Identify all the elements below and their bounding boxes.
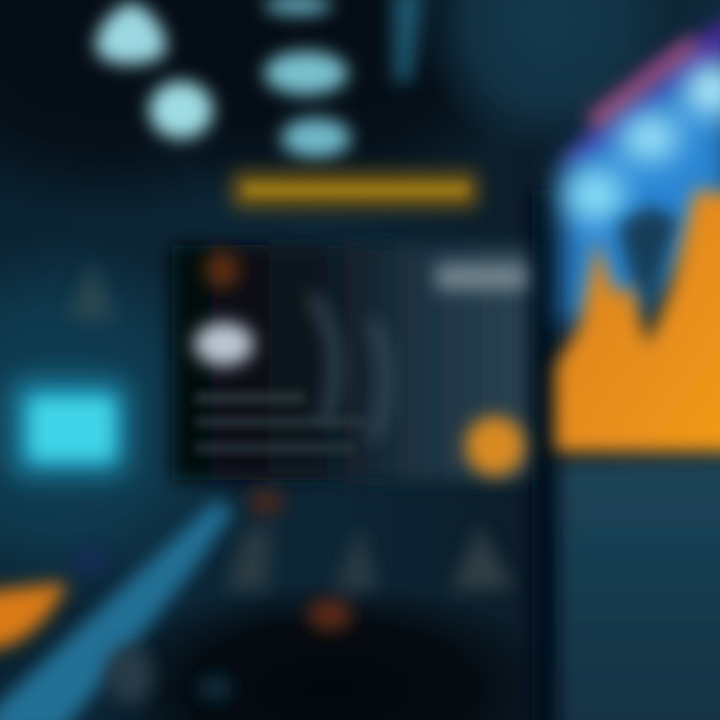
orange circle [465,416,525,476]
purple dot bottom-left [68,550,108,574]
blue diagonal beam [0,500,235,720]
cyan screen [14,382,126,474]
orange area chart [555,190,720,452]
top-left glowing cloud icons [96,2,213,139]
lower right block [560,462,720,720]
panel: orange dot [204,252,240,288]
right chart panel [555,15,720,720]
purple and pink chart edge [558,15,720,170]
blue chart top [562,60,720,330]
central dark panel [172,245,527,480]
top vertical bar [392,0,425,82]
orange bottom-left shape [0,582,68,652]
panel: curved arcs [312,295,386,440]
panel: text lines [195,393,365,452]
yellow heading [232,172,478,208]
left triangle icon [68,262,115,318]
bottom row icons [106,488,515,705]
top-centre glowing pills [264,0,351,158]
panel: white label [194,322,254,366]
dark vertical divider [532,190,560,720]
white caption top-right of panel [435,264,527,290]
